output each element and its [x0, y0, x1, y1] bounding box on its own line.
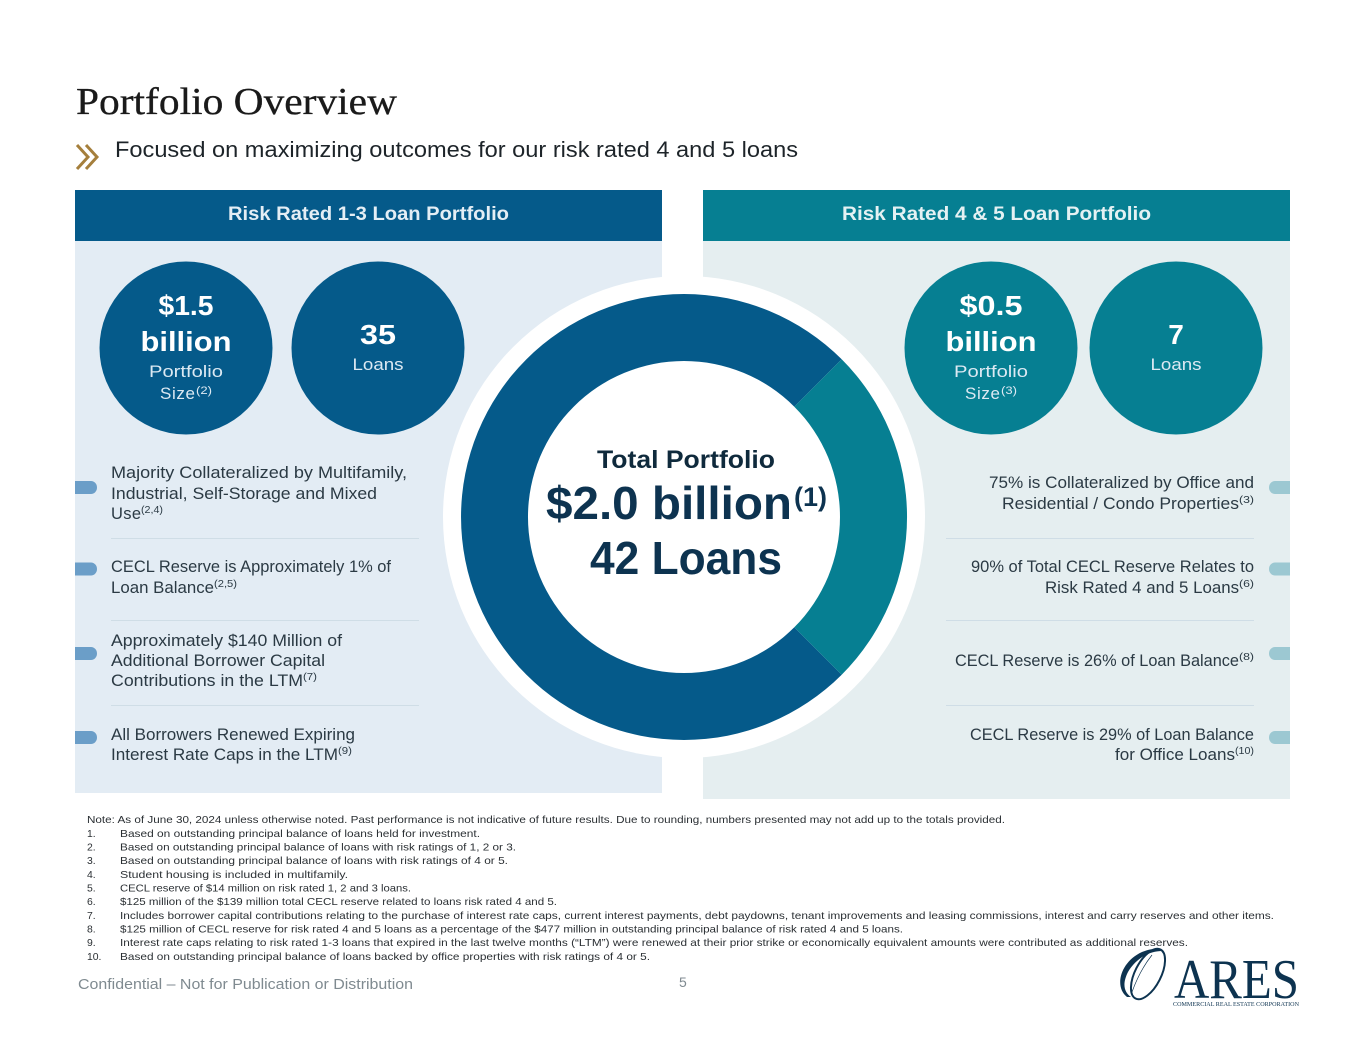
stat circle: 0.5 billion	[904, 262, 1078, 434]
right bullet: office reserve	[970, 726, 1254, 764]
panel header: risk rated 1-3	[75, 190, 662, 241]
left bullet: interest rate caps: Interest Rate Caps in the LTM	[111, 746, 338, 764]
stat circle: 0.5 billion: $0.5	[960, 290, 1022, 321]
confidentiality footer: Confidential – Not for Publication or Distribution	[78, 976, 413, 993]
stat circle: 1.5 billion: Portfolio	[149, 362, 223, 381]
stat circle: 1.5 billion: Size	[160, 384, 195, 403]
page number: 5	[679, 974, 687, 990]
right bullet: office reserve: CECL Reserve is 29% of Loan Balance	[970, 726, 1254, 744]
right bullet: total reserve: 90% of Total CECL Reserve Relates to	[971, 558, 1254, 576]
right bullet: collateral: (3)	[1239, 494, 1254, 506]
footnotes: 5.	[87, 884, 96, 894]
footnotes: 8.	[87, 924, 96, 936]
icon: double chevron	[77, 145, 97, 169]
right bullet: collateral: Residential / Condo Properties	[1002, 495, 1239, 513]
donut chart	[443, 276, 925, 758]
right bullet: office reserve: for Office Loans	[1115, 746, 1235, 764]
left bullet: CECL reserve	[111, 558, 391, 597]
stat circle: 0.5 billion: Portfolio	[954, 362, 1028, 381]
donut centre text	[546, 446, 827, 584]
left bullet: collateral: Use	[111, 505, 141, 523]
footnotes: Based on outstanding principal balance of loans backed by office properties with risk ratings of 4 or 5.	[120, 952, 650, 963]
donut centre text: (1)	[794, 482, 827, 512]
footnotes: Interest rate caps relating to risk rated 1-3 loans that expired in the last twelve months (“LTM”) were renewed at their prior strike or economically equivalent amounts were contributed as additional reserves.	[120, 938, 1188, 949]
footnotes: Based on outstanding principal balance of loans held for investment.	[120, 829, 480, 840]
left bullet: borrower capital: Approximately $140 Million of	[111, 632, 342, 650]
stat circle: 7 loans: 7	[1168, 319, 1184, 350]
right bullet: collateral	[989, 474, 1254, 513]
left bullet: borrower capital: Contributions in the LTM	[111, 672, 303, 690]
footnotes: 1.	[87, 829, 96, 840]
stat circle: 7 loans: Loans	[1150, 355, 1202, 374]
right bullet: office reserve: (10)	[1235, 745, 1254, 757]
right bullet: reserve share: CECL Reserve is 26% of Loan Balance	[955, 652, 1239, 670]
right bullet: total reserve	[971, 558, 1254, 597]
right bullet: total reserve: (6)	[1239, 578, 1254, 590]
footnotes: 2.	[87, 842, 96, 854]
stat circle: 0.5 billion: (3)	[1001, 385, 1017, 397]
stat circle: 1.5 billion: billion	[140, 326, 232, 357]
right bullet: total reserve: Risk Rated 4 and 5 Loans	[1045, 579, 1239, 597]
left bullet: borrower capital: Additional Borrower Capital	[111, 652, 325, 670]
footnotes: 10.	[87, 952, 101, 963]
left bullet: borrower capital	[111, 632, 342, 690]
footnotes: Student housing is included in multifamily.	[120, 870, 348, 881]
donut centre text: 42 Loans	[590, 532, 782, 584]
stat circle: 35 loans	[292, 262, 464, 434]
stat circle: 7 loans	[1090, 262, 1262, 434]
panel: risk rated 4 and 5	[703, 190, 1290, 799]
left bullet: interest rate caps: (9)	[338, 745, 352, 757]
footnotes: 3.	[87, 856, 96, 867]
left bullet: borrower capital: (7)	[303, 671, 317, 683]
left bullet markers	[75, 481, 97, 744]
logo: Ares	[1120, 944, 1299, 1011]
left bullet: interest rate caps	[111, 726, 355, 764]
stat circle: 35 loans: 35	[360, 319, 396, 350]
stat circle: 0.5 billion: Size	[965, 384, 1000, 403]
footnotes: Based on outstanding principal balance of loans with risk ratings of 4 or 5.	[120, 856, 508, 867]
left bullet: interest rate caps: All Borrowers Renewed Expiring	[111, 726, 355, 744]
stat circle: 0.5 billion: billion	[946, 326, 1036, 357]
footnotes: Note: As of June 30, 2024 unless otherwise noted. Past performance is not indicative of future results. Due to rounding, numbers presented may not add up to the totals provided.	[87, 815, 1005, 826]
footnotes: Includes borrower capital contributions relating to the purchase of interest rate caps, current interest payments, debt paydowns, tenant improvements and leasing commissions, interest and carry reserves and other items.	[120, 911, 1274, 922]
footnotes: 6.	[87, 897, 96, 908]
left bullet: CECL reserve: CECL Reserve is Approximately 1% of	[111, 558, 391, 576]
panel header: risk rated 4 and 5	[703, 190, 1290, 241]
right bullet: collateral: 75% is Collateralized by Office and	[989, 474, 1254, 492]
left bullet: collateral: Industrial, Self-Storage and Mixed	[111, 485, 377, 503]
footnotes: CECL reserve of $14 million on risk rated 1, 2 and 3 loans.	[120, 884, 411, 894]
stat circle: 1.5 billion	[100, 262, 272, 434]
subtitle: Focused on maximizing outcomes for our risk rated 4 and 5 loans	[115, 137, 798, 162]
logo mark	[1120, 944, 1172, 1004]
panel header: risk rated 4 and 5: Risk Rated 4 & 5 Loan Portfolio	[842, 204, 1151, 225]
panel: risk rated 1-3	[75, 190, 662, 793]
donut centre text: Total Portfolio	[597, 446, 775, 474]
right bullet: reserve share: (8)	[1239, 651, 1254, 663]
footnotes: $125 million of CECL reserve for risk rated 4 and 5 loans as a percentage of the $477 million in outstanding principal balance of risk rated 4 and 5 loans.	[120, 924, 903, 936]
panel header: risk rated 1-3: Risk Rated 1-3 Loan Portfolio	[228, 204, 509, 225]
footnotes: 7.	[87, 911, 96, 922]
stat circle: 1.5 billion: (2)	[196, 385, 212, 397]
footnotes: $125 million of the $139 million total CECL reserve related to loans risk rated 4 and 5.	[120, 897, 557, 908]
footnotes: 9.	[87, 938, 96, 949]
footnotes: 4.	[87, 870, 96, 881]
logo tagline: COMMERCIAL REAL ESTATE CORPORATION	[1173, 1001, 1299, 1008]
left bullet: CECL reserve: Loan Balance	[111, 579, 214, 597]
stat circle: 35 loans: Loans	[352, 355, 404, 374]
logo wordmark: ARES	[1174, 949, 1299, 1011]
left bullet: collateral	[111, 464, 407, 523]
stat circle: 1.5 billion: $1.5	[158, 290, 214, 321]
title: Portfolio Overview	[76, 81, 398, 123]
footnotes	[87, 815, 1274, 963]
left bullet: CECL reserve: (2,5)	[214, 578, 237, 590]
footnotes: Based on outstanding principal balance of loans with risk ratings of 1, 2 or 3.	[120, 842, 516, 854]
left bullet: collateral: Majority Collateralized by Multifamily,	[111, 464, 407, 482]
left bullet: collateral: (2,4)	[141, 504, 163, 516]
right bullet markers	[1269, 481, 1290, 744]
donut centre text: $2.0 billion	[546, 477, 792, 529]
